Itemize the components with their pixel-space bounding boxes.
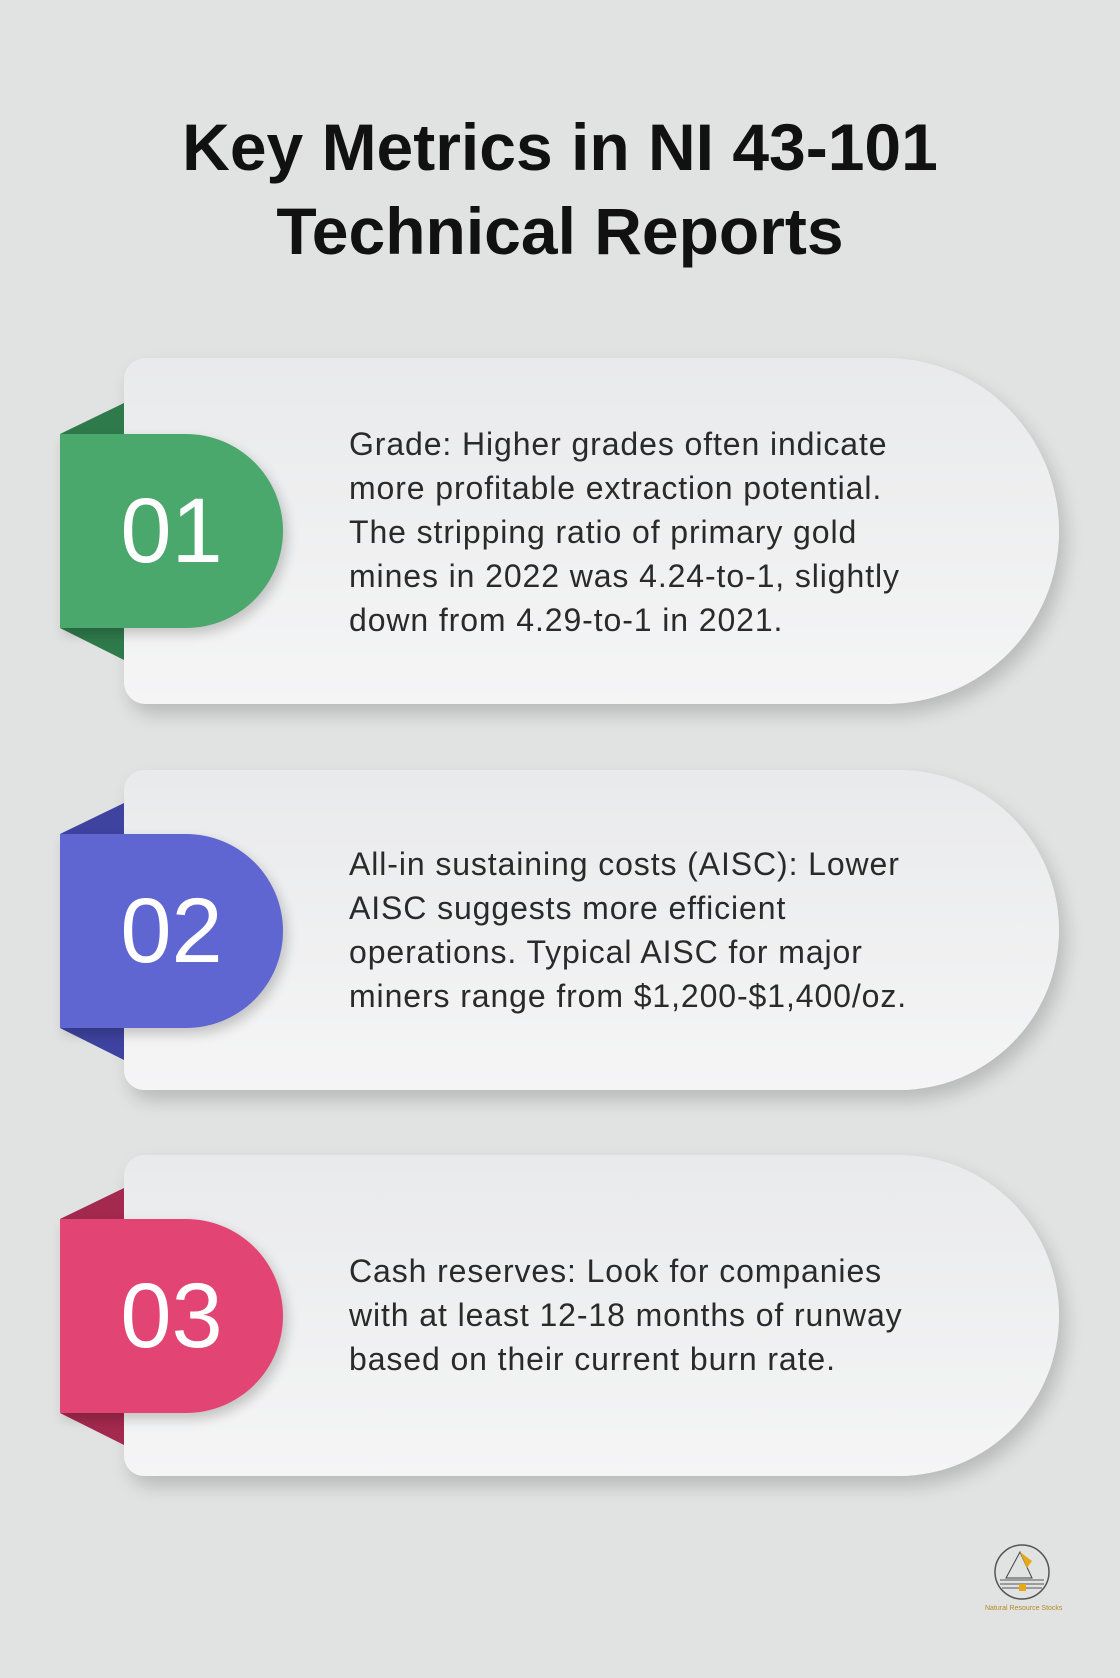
tab 02: 02: [120, 880, 223, 982]
text 2: All-in sustaining costs (AISC): Lower: [349, 846, 900, 882]
text 1: Grade: Higher grades often indicate: [349, 426, 887, 462]
fold 1: [60, 403, 124, 660]
tab 01: 01: [120, 480, 223, 582]
title: [182, 110, 938, 268]
card 2: [124, 770, 1059, 1090]
fold 2: [60, 803, 124, 1060]
tab 02: [60, 834, 283, 1028]
panel: 01 grade: [59, 358, 1072, 721]
panel: 02 AISC: [59, 770, 1072, 1107]
title: Technical Reports: [276, 194, 844, 268]
text 3: with at least 12-18 months of runway: [349, 1297, 903, 1333]
text 3: Cash reserves: Look for companies: [349, 1253, 882, 1289]
fold 3: [60, 1188, 124, 1445]
logo: Natural Resource Stocks: [985, 1605, 1062, 1612]
tab 03: [60, 1219, 283, 1413]
logo: [985, 1544, 1062, 1612]
text 3: based on their current burn rate.: [349, 1341, 836, 1377]
text 1: The stripping ratio of primary gold: [349, 514, 857, 550]
text 2: [349, 846, 907, 1014]
text 2: miners range from $1,200-$1,400/oz.: [349, 978, 907, 1014]
tab 01: [60, 434, 283, 628]
text 1: mines in 2022 was 4.24-to-1, slightly: [349, 558, 900, 594]
text 2: AISC suggests more efficient: [349, 890, 786, 926]
text 1: [349, 426, 900, 638]
text 1: down from 4.29-to-1 in 2021.: [349, 602, 783, 638]
text 1: more profitable extraction potential.: [349, 470, 882, 506]
card 1: [124, 358, 1059, 704]
title: Key Metrics in NI 43-101: [182, 110, 938, 184]
panel: 03 cash: [59, 1155, 1072, 1493]
card 3: [124, 1155, 1059, 1476]
tab 03: 03: [120, 1265, 223, 1367]
text 2: operations. Typical AISC for major: [349, 934, 863, 970]
text 3: [349, 1253, 903, 1377]
